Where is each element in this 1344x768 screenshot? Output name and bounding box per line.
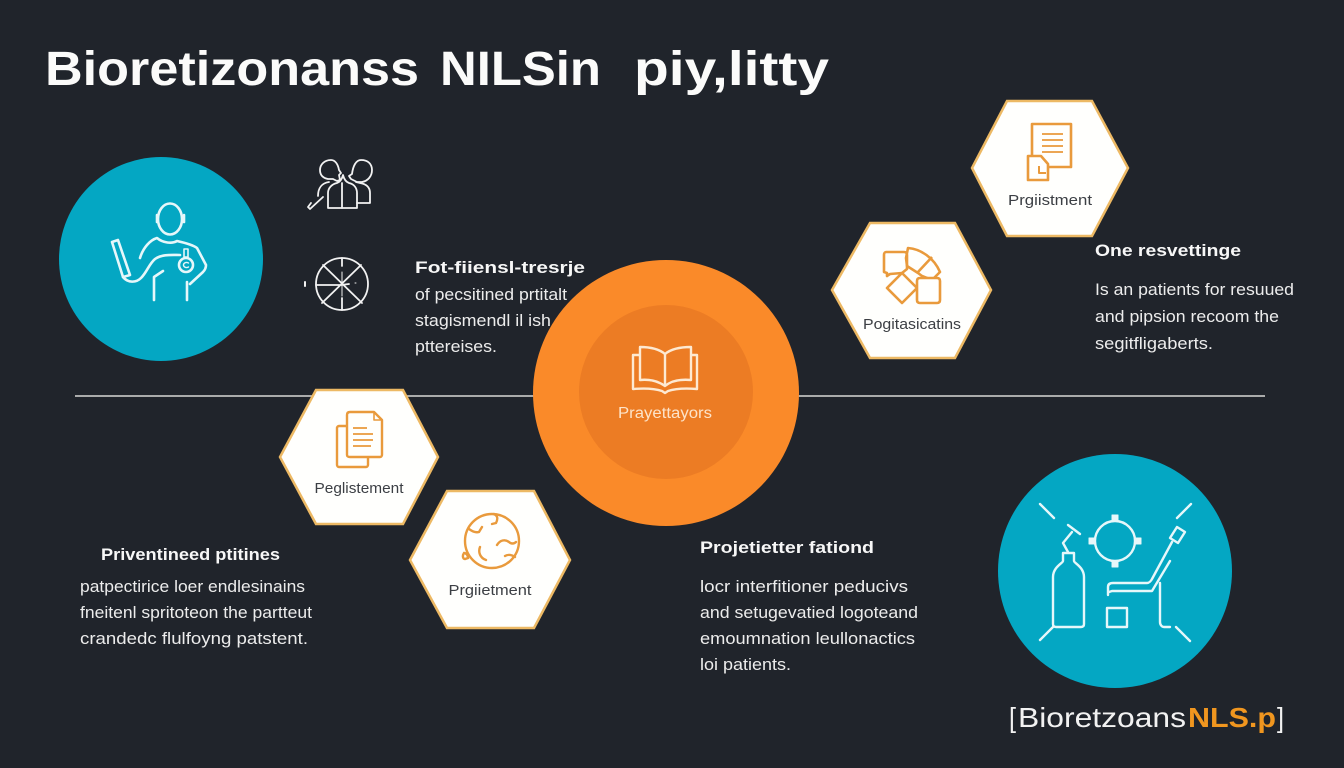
text block: lower centre: locr interfitioner peducivs	[700, 578, 908, 596]
text block: lower left: Priventineed ptitines	[101, 545, 280, 564]
hexagon: lower brain	[410, 491, 570, 628]
text block: lower left: patpectirice loer endlesinains	[80, 578, 305, 596]
label: Prgiietment	[448, 583, 532, 599]
text block: upper left: pttereises.	[415, 338, 497, 356]
text block: upper left: of pecsitined prtitalt	[415, 286, 567, 304]
text block: lower centre: Projetietter fationd	[700, 538, 874, 557]
label: Peglistement	[314, 481, 404, 497]
brand wordmark: NLS.p	[1188, 702, 1276, 733]
brand wordmark: Bioretzoans	[1018, 702, 1186, 733]
text block: right: and pipsion recoom the	[1095, 308, 1279, 326]
label: Pogitasicatins	[863, 317, 961, 333]
icon: stacked documents	[337, 412, 382, 467]
brand wordmark: [	[1009, 702, 1016, 733]
central orange circle	[533, 260, 799, 526]
title: Bioretizonanss	[45, 43, 419, 96]
text block: lower centre: emoumnation leullonactics	[700, 630, 915, 648]
text block: lower left	[80, 545, 312, 648]
text block: upper left: Fot-fiiensl-tresrje	[415, 258, 585, 277]
icon: person with tablet	[112, 204, 206, 300]
text block: lower left: fneitenl spritoteon the partteut	[80, 604, 312, 622]
hexagon: left documents	[280, 390, 438, 524]
text block: lower centre	[700, 538, 918, 674]
icon: puzzle tiles	[884, 248, 940, 303]
text block: lower left: crandedc flulfoyng patstent.	[80, 630, 308, 648]
text block: right	[1095, 241, 1294, 353]
text block: right: One resvettinge	[1095, 241, 1241, 260]
text block: lower centre: and setugevatied logoteand	[700, 604, 918, 622]
hexagon: right blocks	[832, 223, 991, 358]
title	[45, 43, 829, 96]
brand wordmark	[1009, 702, 1284, 733]
icon: document with page	[1028, 124, 1071, 180]
brand wordmark: ]	[1277, 702, 1284, 733]
text block: upper left: stagismendl il ish	[415, 312, 551, 330]
text block: right: Is an patients for resuued	[1095, 281, 1294, 299]
title: NILSin	[440, 43, 601, 96]
hexagon: top right document	[972, 101, 1128, 236]
label: Prgiistment	[1008, 193, 1092, 209]
icon: lab equipment	[1040, 504, 1191, 641]
text block: right: segitfligaberts.	[1095, 335, 1213, 353]
icon: segmented wheel	[305, 258, 368, 310]
icon: open book	[633, 347, 697, 393]
title: piy,litty	[634, 43, 829, 96]
icon: brain globe	[463, 514, 519, 568]
text block: lower centre: loi patients.	[700, 656, 791, 674]
icon: two people	[308, 160, 372, 209]
label: central: Prayettayors	[618, 405, 712, 422]
panel: teal person circle	[59, 157, 263, 361]
panel: teal equipment circle	[998, 454, 1232, 688]
text block: upper left	[415, 258, 585, 356]
